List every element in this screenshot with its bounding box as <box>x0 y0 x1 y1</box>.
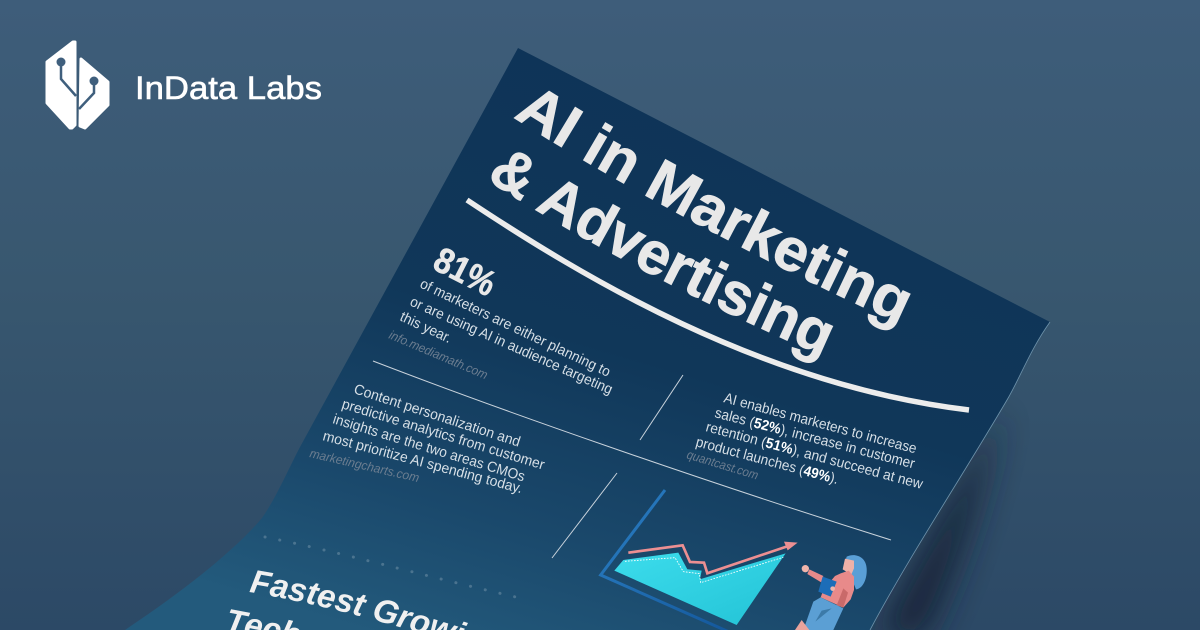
area chart illustration <box>601 490 798 630</box>
text block: audience targeting: of marketers are either planning to <box>417 276 613 381</box>
title: AI in Marketing <box>514 90 911 330</box>
trend arrow <box>628 542 798 573</box>
dashed line <box>625 557 783 583</box>
text block: AI enables marketers <box>685 390 925 493</box>
text block: content personalization: insights are the two areas CMOs <box>331 412 527 485</box>
paper shadow <box>875 410 1000 630</box>
text block: audience targeting: info.mediamath.com <box>387 328 490 382</box>
text block: AI enables marketers: sales (52%), increase in customer <box>713 405 917 472</box>
text block: content personalization: most prioritize AI spending today. <box>321 428 524 497</box>
text block: content personalization: marketingcharts.com <box>308 446 421 485</box>
logo icon <box>47 42 108 128</box>
title: & Advertising <box>492 152 834 363</box>
text block: content personalization: predictive analytics from customer <box>340 397 546 474</box>
text block: content personalization: Content personalization and <box>352 382 522 451</box>
woman illustration <box>795 555 867 630</box>
text block: AI enables marketers: retention (51%), and succeed at new <box>704 419 925 493</box>
vertical divider top <box>640 375 683 440</box>
logo <box>47 42 322 128</box>
horizontal divider <box>373 361 891 540</box>
title underline <box>467 200 969 410</box>
teal area <box>614 553 786 625</box>
dotted separator <box>265 537 520 598</box>
text block: audience targeting: this year. <box>397 309 454 347</box>
logo wordmark: InData Labs <box>135 70 322 106</box>
text block: AI enables marketers: quantcast.com <box>685 447 760 483</box>
text block: AI enables marketers: AI enables marketers to increase <box>722 390 918 457</box>
paper sheet <box>125 48 1050 630</box>
text block: content personalization <box>308 382 546 497</box>
paper edge highlight <box>870 322 1050 630</box>
stat: 81%: 81% <box>427 239 503 304</box>
text block: AI enables marketers: product launches (49%). <box>694 434 840 488</box>
vertical divider bottom <box>552 473 617 558</box>
chart axes <box>601 490 728 630</box>
text block: audience targeting: or are using AI in audience targeting <box>407 294 615 398</box>
